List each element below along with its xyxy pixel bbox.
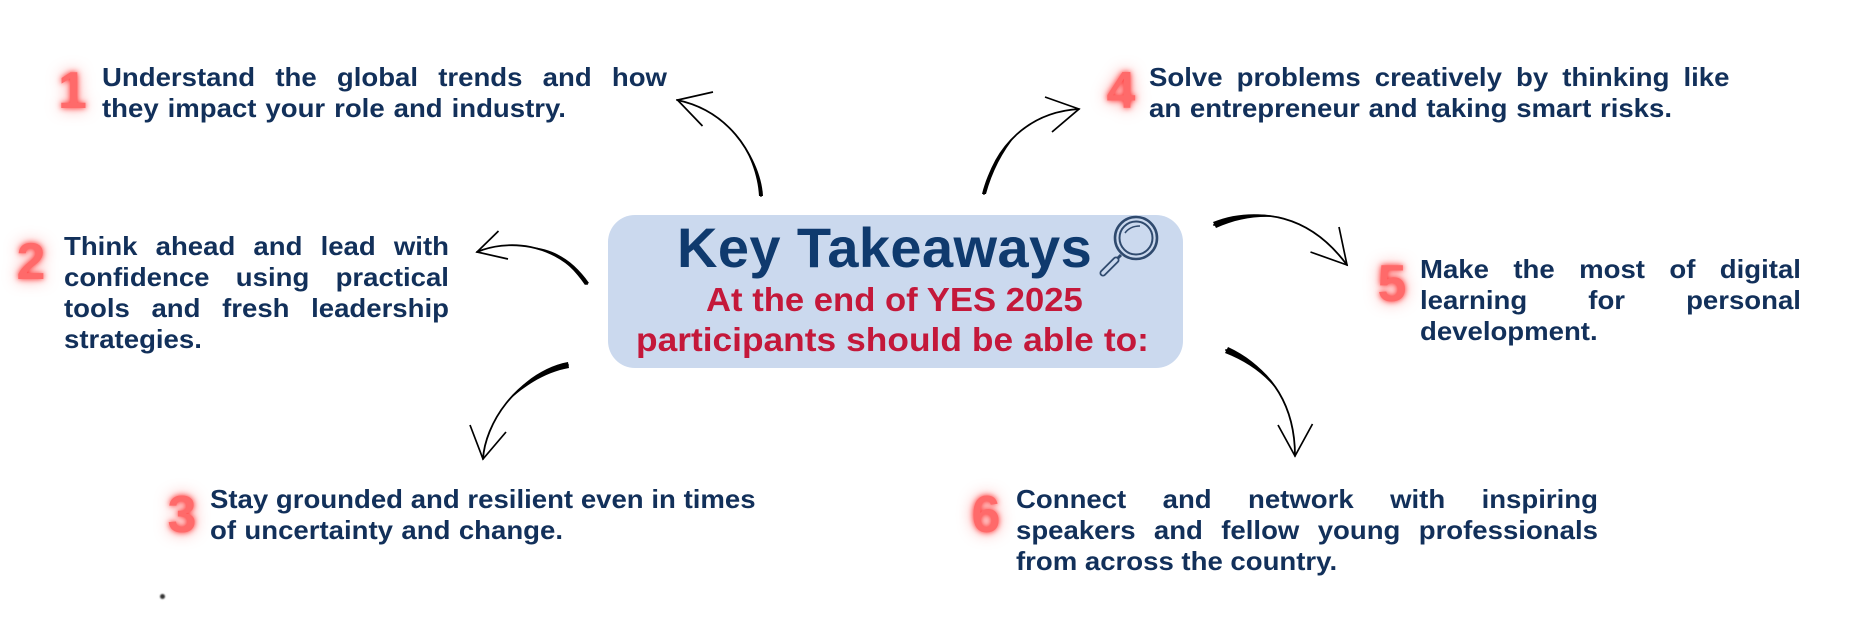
item 6: connect and network bbox=[964, 484, 1598, 576]
number 6: 6 bbox=[972, 486, 1000, 544]
text 4: Solve problems creatively by thinking like bbox=[1149, 62, 1729, 92]
text 2: confidence using practical bbox=[64, 262, 449, 292]
number 1: 1 bbox=[58, 62, 87, 120]
item 1: global trends bbox=[55, 62, 667, 122]
number 3: 3 bbox=[168, 486, 196, 544]
item 5: digital learning bbox=[1371, 254, 1801, 346]
central panel: key takeaways bbox=[608, 215, 1183, 368]
text 2: strategies. bbox=[64, 324, 202, 354]
number 4: 4 bbox=[1107, 62, 1135, 120]
text 6: speakers and fellow young professionals bbox=[1016, 514, 1598, 544]
text 6: from across the country. bbox=[1016, 546, 1337, 576]
text 6 bbox=[1016, 484, 1598, 576]
text 3 bbox=[210, 484, 756, 544]
text 3: Stay grounded and resilient even in times bbox=[210, 484, 756, 514]
item 4: solve problems bbox=[1100, 62, 1729, 122]
text 5: development. bbox=[1420, 316, 1598, 346]
text 2: Think ahead and lead with bbox=[64, 230, 449, 260]
text 5 bbox=[1420, 254, 1801, 346]
text 3: of uncertainty and change. bbox=[210, 514, 563, 544]
text 6: Connect and network with inspiring bbox=[1016, 484, 1598, 514]
item 3: grounded and resilient bbox=[162, 484, 756, 544]
text 5: Make the most of digital bbox=[1420, 254, 1801, 284]
stray dot bbox=[160, 594, 164, 598]
icon: magnifying glass bbox=[1100, 216, 1158, 276]
subheading: participants should be able to: bbox=[636, 321, 1149, 358]
number 5: 5 bbox=[1378, 255, 1406, 313]
text 2: tools and fresh leadership bbox=[64, 292, 449, 322]
number 2: 2 bbox=[17, 233, 45, 291]
text 1 bbox=[102, 62, 667, 122]
text 4 bbox=[1149, 62, 1729, 122]
text 1: they impact your role and industry. bbox=[102, 92, 566, 122]
subheading: At the end of YES 2025 bbox=[706, 281, 1083, 318]
text 1: Understand the global trends and how bbox=[102, 62, 667, 92]
text 4: an entrepreneur and taking smart risks. bbox=[1149, 92, 1672, 122]
heading: Key Takeaways: Key Takeaways bbox=[677, 216, 1092, 279]
item 2: lead with confidence bbox=[11, 230, 449, 354]
text 2 bbox=[64, 230, 449, 354]
text 5: learning for personal bbox=[1420, 284, 1801, 314]
subheading bbox=[636, 281, 1149, 358]
